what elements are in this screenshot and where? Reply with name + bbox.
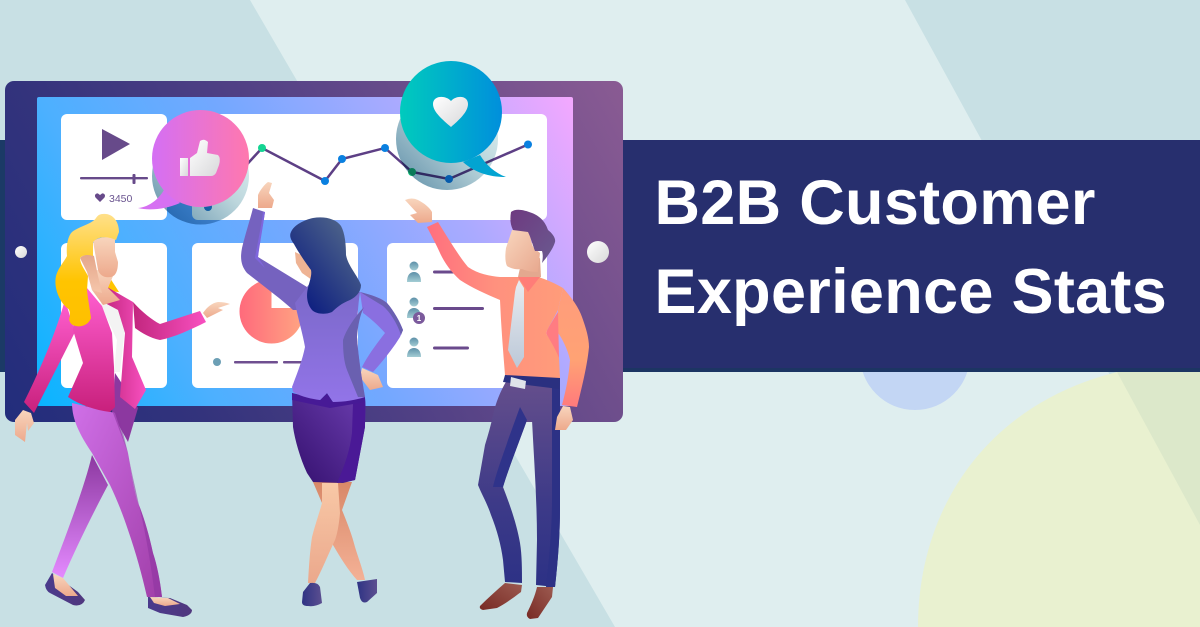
jacket right front <box>103 287 146 409</box>
line chart <box>204 140 532 211</box>
legend dot and lines <box>213 358 307 366</box>
face <box>505 230 540 272</box>
lower hand <box>360 368 383 390</box>
face <box>93 237 118 277</box>
user row 2 <box>407 298 484 324</box>
shirt <box>427 222 563 382</box>
bent arm <box>360 292 403 372</box>
extended hand <box>203 302 230 318</box>
user row 2: 1 <box>417 314 422 323</box>
hair <box>510 210 555 263</box>
title: Experience Stats <box>654 257 1167 327</box>
background shape: blue circle <box>860 300 970 410</box>
panel: blank left card <box>61 243 167 388</box>
trousers <box>478 378 560 587</box>
lower hand <box>555 406 573 430</box>
left shoe <box>480 583 522 610</box>
lower hand <box>15 410 34 442</box>
icon: heart speech bubble <box>396 61 506 190</box>
panel: user list card <box>387 243 547 388</box>
pie chart <box>240 278 305 344</box>
back leg <box>313 482 365 580</box>
belt <box>503 375 560 389</box>
tablet screen <box>37 97 573 406</box>
raised hand <box>405 198 432 223</box>
right trouser shade <box>546 378 560 587</box>
panel: video card <box>61 114 167 220</box>
belt buckle <box>510 377 526 389</box>
user row 1 <box>407 262 463 282</box>
video progress slider <box>80 174 148 184</box>
panel: pie chart card <box>192 243 358 388</box>
tie <box>508 280 524 368</box>
user row 3 <box>407 338 469 357</box>
hip shade <box>112 373 138 442</box>
icon: play <box>102 129 130 160</box>
right shoe <box>527 587 553 619</box>
back leg <box>52 455 108 578</box>
title: B2B Customer <box>654 168 1096 238</box>
collar <box>518 277 540 292</box>
blonde hair <box>55 214 119 326</box>
right shoe <box>357 579 377 602</box>
icon: heart small <box>95 193 105 202</box>
background shape: pale yellow arc <box>918 372 1200 627</box>
sleeve shade <box>343 307 365 397</box>
navy title banner <box>0 140 1200 372</box>
dark hair <box>290 217 361 314</box>
neck <box>88 270 120 305</box>
neck <box>518 258 541 282</box>
raised arm <box>241 208 310 310</box>
front leg <box>72 403 162 597</box>
ear <box>80 255 102 293</box>
tablet frame <box>5 81 623 422</box>
figure: man in coral shirt <box>405 198 589 619</box>
jacket left front <box>68 288 115 412</box>
white blouse <box>100 300 125 372</box>
like count: 3450 <box>109 193 133 205</box>
extended arm <box>133 302 206 340</box>
face <box>295 252 312 280</box>
left shoe <box>302 583 322 606</box>
left sleeve <box>24 300 75 413</box>
tablet camera dot <box>15 246 27 258</box>
figure: woman in purple suit <box>241 182 403 606</box>
hair tail behind neck <box>100 278 119 292</box>
tablet home button <box>587 241 609 263</box>
jacket body <box>292 283 365 402</box>
raised hand <box>258 182 274 208</box>
icon: thumbs-up speech bubble <box>138 110 249 224</box>
skirt <box>292 393 365 483</box>
leg stripe <box>113 413 162 597</box>
right arm <box>558 288 589 407</box>
shirt shade <box>546 312 559 358</box>
panel: line chart card <box>192 114 547 220</box>
left trouser shade <box>493 407 527 487</box>
front leg <box>308 483 340 583</box>
back shoe <box>45 573 85 605</box>
front shoe <box>148 597 192 617</box>
bent arm shade <box>360 292 403 335</box>
figure: woman in pink suit <box>15 214 230 617</box>
